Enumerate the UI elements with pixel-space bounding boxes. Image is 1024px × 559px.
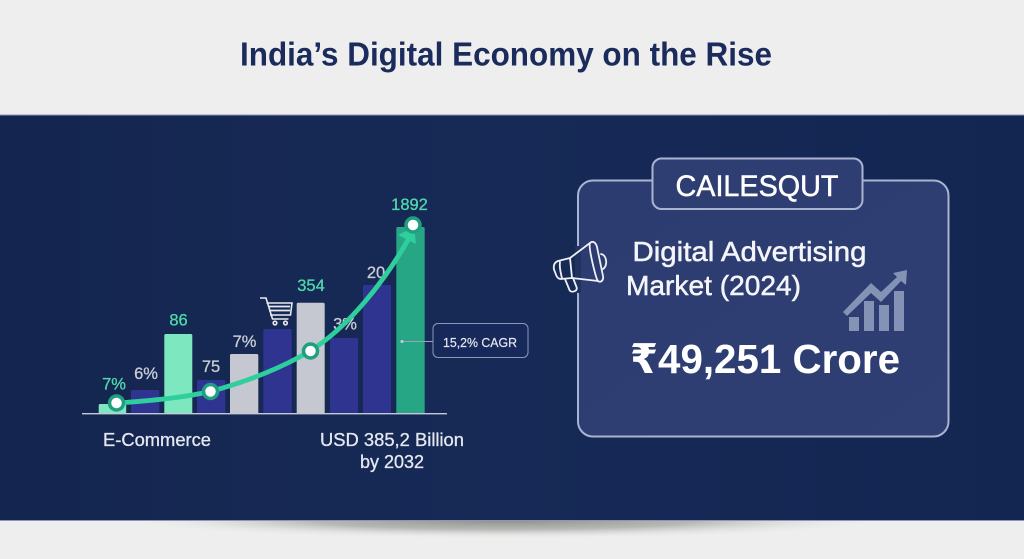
- bar value labels: 3%: [333, 316, 357, 334]
- icon: megaphone: [554, 242, 606, 293]
- bar value labels: 20: [367, 264, 385, 282]
- growth curve with arrow: [116, 227, 416, 403]
- icon: rising chart: [843, 270, 907, 331]
- panel heading: [626, 236, 866, 301]
- bars: [99, 227, 425, 414]
- bar value labels: 86: [169, 312, 188, 330]
- bar value labels: 6%: [134, 365, 158, 383]
- panel tab: [652, 158, 862, 209]
- title: India’s Digital Economy on the Rise: [240, 36, 772, 72]
- bar chart: e-commerce growth: [82, 196, 528, 472]
- x-axis label: e-commerce: E-Commerce: [103, 430, 211, 450]
- callout: CAGR: 15,2% CAGR: [443, 335, 517, 350]
- bar value labels: 7%: [102, 376, 126, 394]
- x-axis label: market size: USD 385,2 Billion: [320, 430, 464, 450]
- navy band: [0, 115, 1024, 520]
- callout: CAGR: [400, 324, 528, 358]
- panel heading: Market (2024): [626, 270, 801, 301]
- axis line: [82, 413, 447, 414]
- panel tab: CAILESQUT: [676, 170, 838, 203]
- x-axis label: market size: [320, 430, 464, 472]
- bottom shadow: [120, 501, 890, 539]
- curve markers: [110, 218, 420, 410]
- market value: ₹49,251 Crore: [630, 336, 900, 382]
- bar value labels: [102, 196, 428, 394]
- bar value labels: 75: [202, 358, 220, 376]
- panel: digital advertising market: [554, 158, 948, 436]
- bar value labels: 1892: [391, 196, 428, 214]
- panel heading: Digital Advertising: [632, 236, 866, 267]
- panel box: [578, 180, 948, 436]
- icon: shopping cart: [260, 298, 292, 325]
- x-axis label: market size: by 2032: [360, 452, 424, 472]
- bar value labels: 354: [297, 277, 325, 295]
- bar value labels: 7%: [233, 333, 257, 351]
